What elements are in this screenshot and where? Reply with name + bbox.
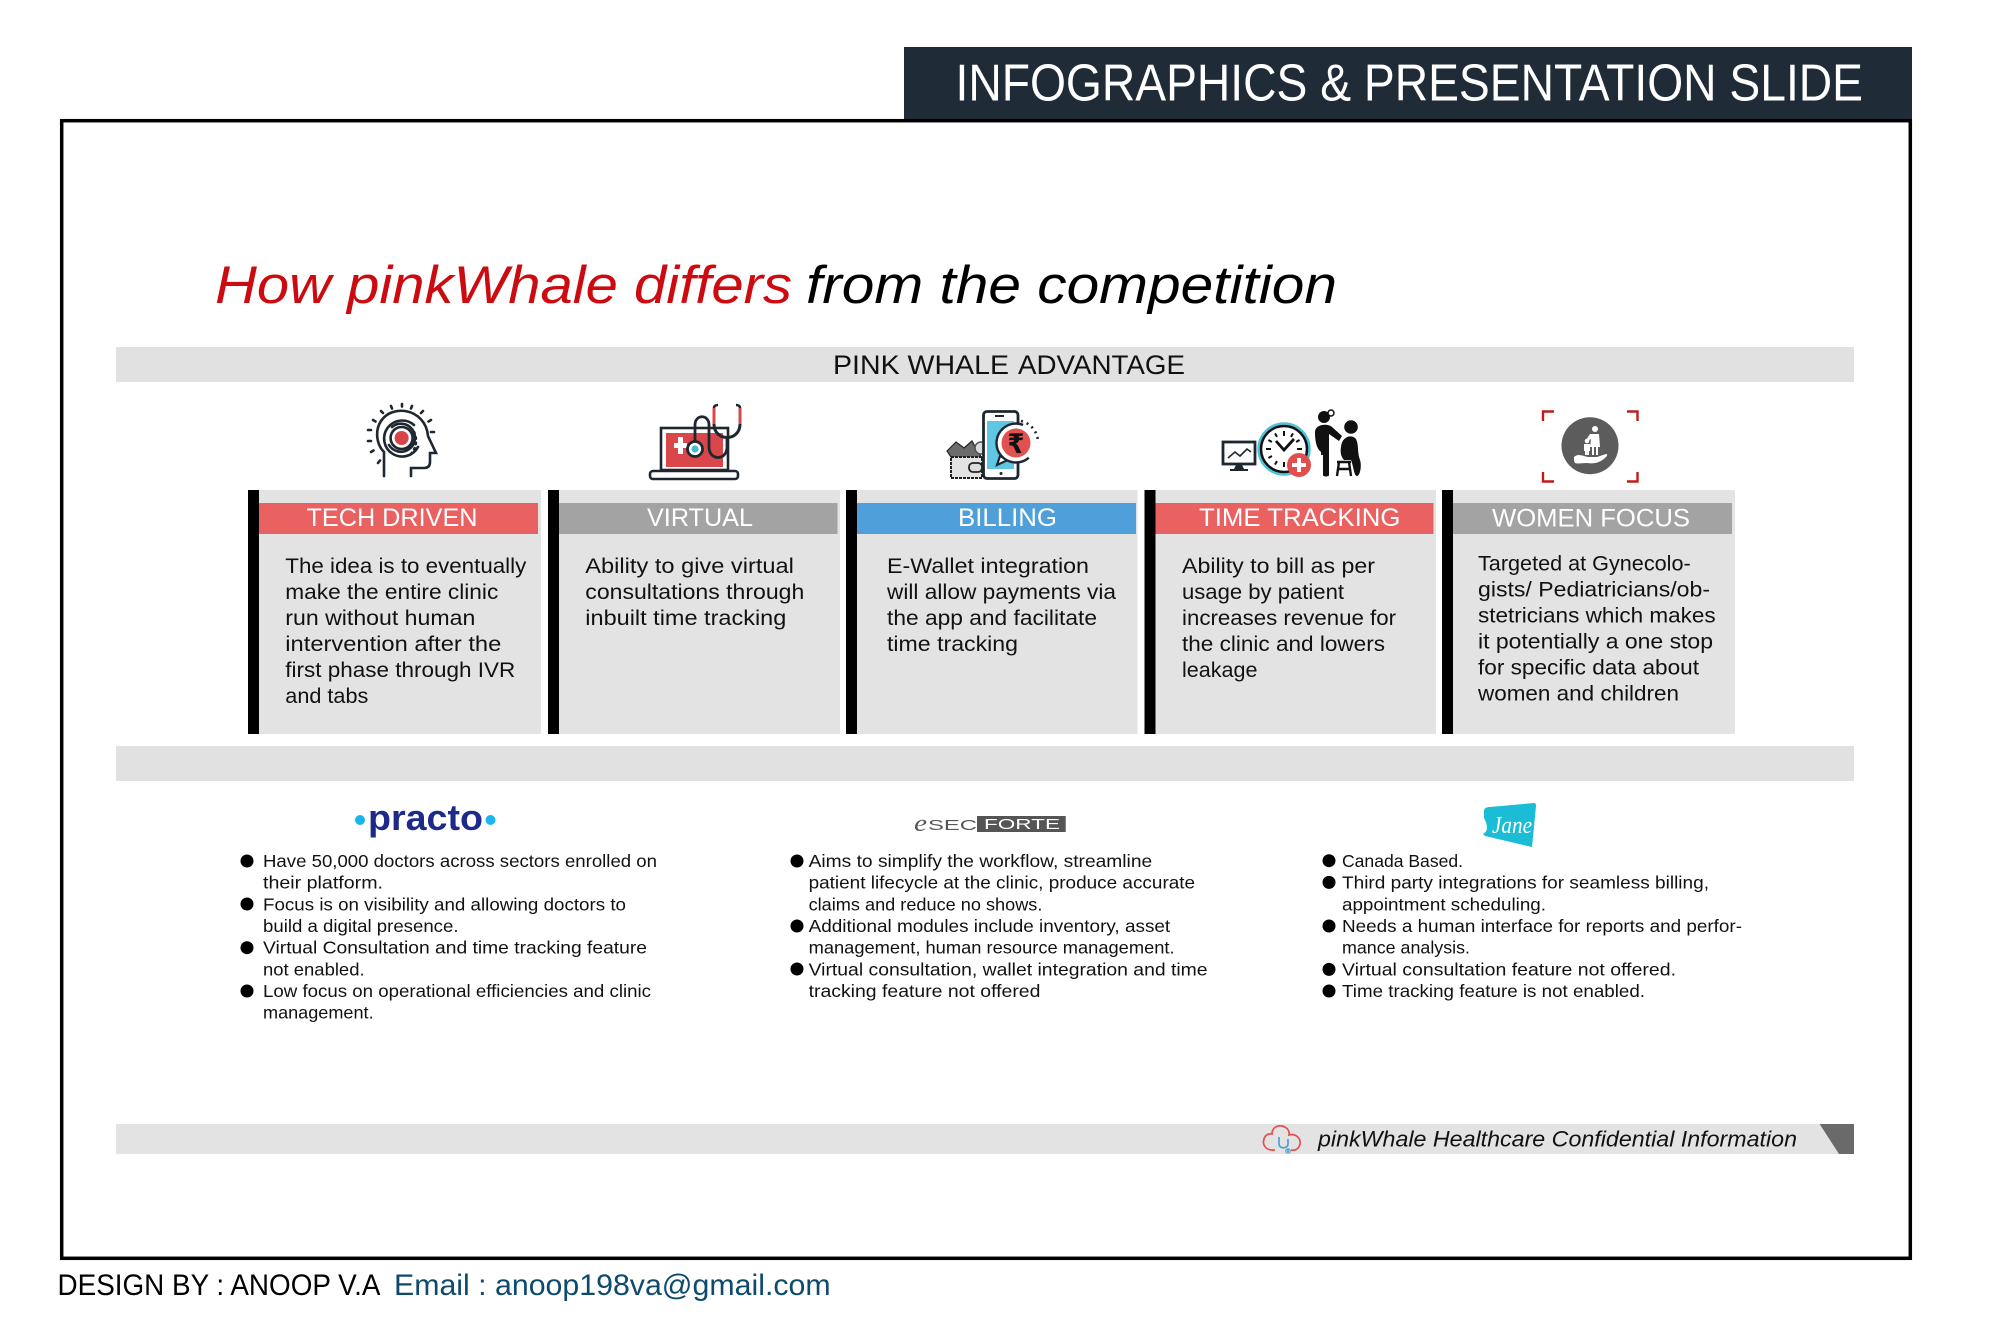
title: from the competition [806, 256, 1337, 315]
list: jane points: mance analysis. [1342, 938, 1470, 958]
text: women focus description: for specific data about [1478, 656, 1699, 680]
text: time tracking description: the clinic and lowers [1182, 632, 1385, 656]
list: practo points: Have 50,000 doctors across sectors enrolled on [263, 851, 657, 871]
text: tech driven description: make the entire clinic [285, 580, 499, 604]
section heading bar: pink whale advantage: PINK WHALE [833, 350, 1009, 380]
list: esec forte points [790, 851, 1208, 1001]
list: practo points: Virtual Consultation and time tracking feature [263, 938, 647, 958]
heading: billing: BILLING [958, 504, 1057, 532]
logo: jane: Jane [1492, 813, 1532, 839]
icon: wallet and phone payment: ₹ [1008, 429, 1024, 460]
text: tech driven description [285, 554, 527, 708]
icon: time tracking clock and doctor [1223, 410, 1361, 477]
logo: esec forte [914, 811, 1066, 837]
text: time tracking description [1182, 554, 1396, 682]
list: practo points: Low focus on operational efficiencies and clinic [263, 981, 651, 1001]
list: practo points: their platform. [263, 873, 383, 893]
section heading bar: pink whale advantage: ADVANTAGE [1018, 350, 1185, 380]
text: virtual description: consultations through [585, 580, 804, 604]
text: women focus description: gists/ Pediatricians/ob- [1478, 578, 1710, 602]
panel: billing [846, 490, 1138, 734]
slide frame [62, 121, 1910, 1258]
title: How pinkWhale differs [215, 256, 792, 315]
text: confidential note: pinkWhale Healthcare Confidential Information [1317, 1126, 1797, 1152]
text: billing description: E-Wallet integration [887, 554, 1089, 578]
text: time tracking description: usage by patient [1182, 580, 1344, 604]
icon: wallet and phone payment [947, 412, 1043, 478]
icon: laptop with stethoscope [650, 405, 740, 479]
text: women focus description: stetricians which makes [1478, 604, 1716, 628]
heading: tech driven [259, 503, 538, 534]
list: practo points: not enabled. [263, 959, 365, 979]
list: practo points [240, 851, 657, 1023]
footer bar [116, 1124, 1854, 1154]
icon: head with target [368, 404, 436, 476]
text: virtual description [585, 554, 804, 630]
list: esec forte points: tracking feature not offered [809, 981, 1040, 1001]
heading: women focus: WOMEN FOCUS [1492, 504, 1690, 532]
list: esec forte points: management, human resource management. [809, 938, 1175, 958]
panel: time tracking [1144, 490, 1436, 734]
list: practo points: build a digital presence. [263, 916, 458, 936]
text: women focus description: Targeted at Gynecolo- [1478, 552, 1691, 576]
list: jane points: Third party integrations for seamless billing, [1342, 873, 1709, 893]
logo: esec forte: e [914, 811, 927, 837]
list: esec forte points: Virtual consultation, wallet integration and time [809, 959, 1208, 979]
panel: virtual [548, 490, 840, 734]
list: esec forte points: Aims to simplify the workflow, streamline [809, 851, 1152, 871]
list: esec forte points: patient lifecycle at the clinic, produce accurate [809, 873, 1195, 893]
list: jane points: Canada Based. [1342, 851, 1463, 871]
list: jane points: appointment scheduling. [1342, 894, 1546, 914]
section heading bar: pink whale advantage [116, 347, 1854, 382]
heading: billing [857, 503, 1136, 534]
text: billing description: will allow payments via [886, 580, 1116, 604]
heading: time tracking: TIME TRACKING [1199, 504, 1400, 532]
text: virtual description: inbuilt time tracking [585, 606, 786, 630]
logo: esec forte: FORTE [984, 816, 1060, 833]
heading: virtual [559, 503, 838, 534]
icon: cloud with stethoscope [1263, 1126, 1300, 1153]
list: esec forte points: Additional modules include inventory, asset [809, 916, 1170, 936]
text: tech driven description: The idea is to eventually [285, 554, 527, 578]
text: time tracking description: increases revenue for [1182, 606, 1396, 630]
text: tech driven description: intervention after the [285, 632, 501, 656]
text: billing description: time tracking [887, 632, 1018, 656]
logo: esec forte: SEC [928, 817, 977, 834]
icon: mother and child in hand [1543, 412, 1638, 482]
divider bar [116, 746, 1854, 781]
text: time tracking description: Ability to bill as per [1182, 554, 1375, 578]
list: jane points: Time tracking feature is not enabled. [1342, 981, 1645, 1001]
text: virtual description: Ability to give virtual [585, 554, 794, 578]
top banner: INFOGRAPHICS & PRESENTATION SLIDE [956, 55, 1863, 113]
heading: virtual: VIRTUAL [647, 504, 753, 532]
designer credit: DESIGN BY : ANOOP V.A [58, 1269, 380, 1302]
heading: tech driven: TECH DRIVEN [306, 504, 478, 532]
list: esec forte points: claims and reduce no shows. [809, 894, 1042, 914]
heading: women focus [1453, 503, 1732, 534]
list: jane points: Needs a human interface for reports and perfor- [1342, 916, 1742, 936]
text: tech driven description: and tabs [285, 684, 368, 708]
list: jane points [1322, 851, 1742, 1001]
logo: practo: practo [368, 797, 483, 838]
text: billing description: the app and facilitate [887, 606, 1097, 630]
list: practo points: management. [263, 1003, 374, 1023]
text: tech driven description: first phase through IVR [285, 658, 515, 682]
text: women focus description: it potentially a one stop [1478, 630, 1713, 654]
heading: time tracking [1156, 503, 1434, 534]
text: women focus description: women and children [1477, 682, 1679, 706]
title [215, 256, 1337, 315]
text: time tracking description: leakage [1182, 658, 1258, 682]
text: billing description [886, 554, 1116, 656]
email credit: Email : anoop198va@gmail.com [394, 1269, 831, 1302]
list: practo points: Focus is on visibility and allowing doctors to [263, 894, 626, 914]
list: jane points: Virtual consultation feature not offered. [1342, 959, 1676, 979]
text: women focus description [1477, 552, 1716, 706]
logo: jane [1483, 803, 1536, 847]
text: tech driven description: run without human [285, 606, 475, 630]
panel: women focus [1442, 490, 1735, 734]
panel: tech driven [248, 490, 541, 734]
